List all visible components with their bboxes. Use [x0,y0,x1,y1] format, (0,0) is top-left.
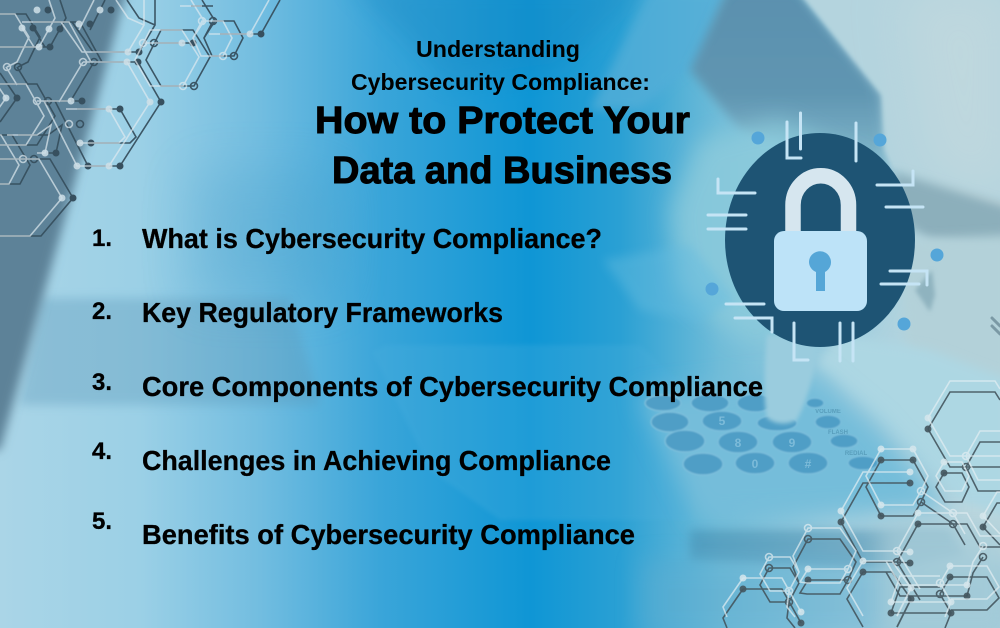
item 5: 5. [92,508,112,535]
finger pressing a key [764,335,818,424]
item 3: Core Components of Cybersecurity Compliance [142,371,763,402]
item 2: Key Regulatory Frameworks [142,297,503,328]
keypad labels: 8 [735,436,742,450]
title: small lines: Cybersecurity Compliance: [351,69,650,95]
pale wall at upper right [797,0,1000,205]
title: main heading: How to Protect Your [315,100,690,142]
hand knuckles [603,245,735,322]
keyhole [809,251,831,291]
keypad labels: REDIAL [845,451,867,457]
dark slate diagonal shape at left [0,0,132,450]
lock backdrop [725,133,915,347]
circuit dots [706,132,944,330]
circuit lines [708,113,927,361]
item 1: What is Cybersecurity Compliance? [142,223,602,254]
light arc beside it [590,0,730,110]
item 5: Benefits of Cybersecurity Compliance [142,519,635,550]
title: small lines [351,36,650,95]
title block [315,36,690,192]
keypad labels: 9 [789,436,796,450]
lock shackle [793,176,848,234]
item 1: 1. [92,225,112,252]
item 4: Challenges in Achieving Compliance [142,445,611,476]
keypad labels: 5 [719,414,726,428]
curved darker band along the top centre [345,0,655,85]
keypad labels: # [805,457,812,471]
lower floor tone [640,560,1000,628]
hand: dark muted back of the hand [690,0,893,175]
keypad labels: FLASH [828,430,848,436]
icon: padlock with circuit lines [706,113,944,361]
decorative hexagon network, bottom right [723,381,1000,628]
item 2: 2. [92,298,112,325]
phone body left part [372,345,700,520]
decorative hexagon network, top left [0,0,280,236]
grey underside of handset [893,172,1000,250]
item 4: 4. [92,438,112,465]
item 5 [92,508,635,550]
title: main heading: Data and Business [332,150,672,192]
keypad labels [719,409,867,471]
pale handset body [900,235,1000,440]
keypad labels: VOLUME [815,409,841,415]
title: small lines: Understanding [416,36,580,62]
item 3: 3. [92,369,112,396]
lock body [774,231,867,311]
handset perforations [992,318,1000,334]
keypad buttons [645,394,878,475]
grey-blue wash at left, middle height [20,298,320,405]
phone body pale surface [817,335,1000,520]
phone base shadow [690,530,965,570]
keypad labels: 0 [752,457,759,471]
handset notch [915,270,935,312]
numbered list [92,223,763,550]
title: main heading [315,100,690,192]
teal glow around the lock [670,120,900,340]
